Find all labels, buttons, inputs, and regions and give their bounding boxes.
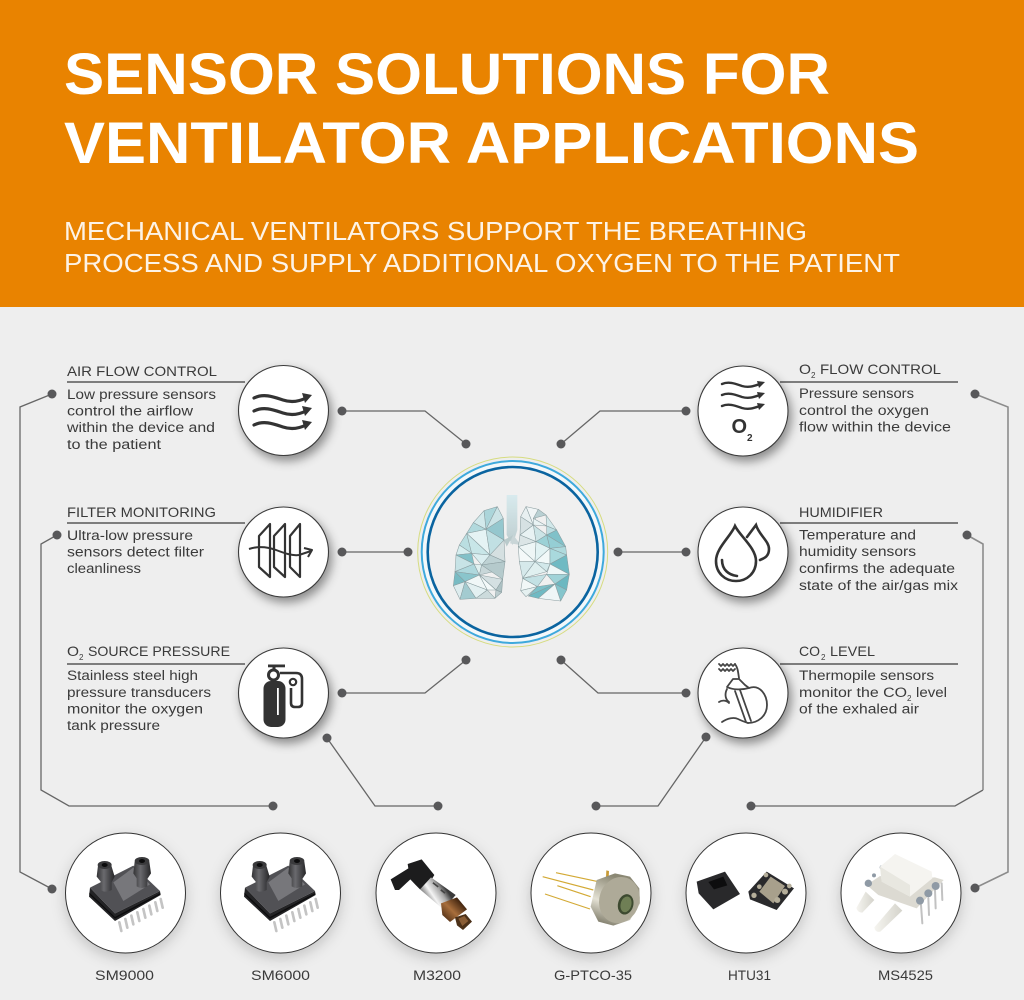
description: co2 level: of the exhaled air — [799, 702, 920, 716]
icon: oxygen flow waves: 2 — [747, 433, 753, 444]
product name: HTU31: HTU31 — [728, 967, 771, 983]
title: VENTILATOR APPLICATIONS — [64, 111, 919, 176]
panel: o2 flow control — [698, 361, 958, 456]
description: o2 flow control — [799, 386, 951, 434]
title — [64, 42, 919, 176]
connector lines — [20, 390, 1008, 894]
product: MS4525 — [841, 833, 961, 983]
product image: HTU31 chips — [697, 872, 794, 910]
heading: o2 flow control: FLOW CONTROL — [820, 361, 941, 377]
description: o2 source pressure: Stainless steel high — [67, 668, 198, 683]
heading: o2 source pressure: SOURCE PRESSURE — [88, 643, 230, 659]
description: o2 flow control: Pressure sensors — [799, 386, 914, 401]
heading: co2 level — [799, 643, 875, 662]
header banner — [0, 0, 1024, 307]
heading: humidifier: HUMIDIFIER — [799, 504, 883, 520]
description: filter monitoring: Ultra-low pressure — [67, 528, 193, 543]
product: SM6000 — [220, 833, 340, 983]
product image: SM9000 sensor — [89, 857, 163, 931]
icon: oxygen tank — [238, 648, 328, 738]
product image: SM6000 sensor — [244, 857, 318, 931]
heading: co2 level: LEVEL — [830, 643, 875, 659]
product: G-PTCO-35 — [531, 833, 651, 983]
product image: MS4525 sensor — [856, 854, 944, 932]
description: o2 source pressure: pressure transducers — [67, 685, 211, 700]
description: filter monitoring: sensors detect filter — [67, 544, 205, 560]
description: co2 level: monitor the CO — [799, 685, 907, 700]
product: HTU31 — [686, 833, 806, 983]
heading: o2 flow control: 2 — [811, 371, 816, 380]
panel: humidifier — [698, 504, 958, 597]
product name: G-PTCO-35: G-PTCO-35 — [554, 967, 632, 983]
description: co2 level — [799, 668, 947, 716]
icon: oxygen flow waves: O — [732, 416, 747, 438]
heading: filter monitoring: FILTER MONITORING — [67, 504, 216, 520]
description: air flow control — [66, 387, 216, 452]
subtitle — [64, 216, 900, 278]
description: o2 source pressure: monitor the oxygen — [67, 702, 203, 716]
panel: o2 source pressure — [67, 643, 328, 738]
title: SENSOR SOLUTIONS FOR — [64, 42, 830, 107]
product name: MS4525: MS4525 — [878, 967, 933, 983]
subtitle: PROCESS AND SUPPLY ADDITIONAL OXYGEN TO THE PATIENT — [64, 248, 900, 278]
product: M3200 — [376, 833, 496, 983]
description: filter monitoring: cleanliness — [67, 561, 141, 576]
heading: co2 level: CO — [799, 643, 820, 659]
description: humidifier — [799, 528, 958, 593]
panel: co2 level — [698, 643, 958, 738]
description: filter monitoring — [67, 528, 205, 576]
description: humidifier: state of the air/gas mix — [799, 578, 958, 593]
description: co2 level: level — [916, 685, 947, 700]
heading: co2 level: 2 — [821, 653, 826, 662]
heading: o2 flow control: O — [799, 361, 811, 377]
description: co2 level: Thermopile sensors — [799, 668, 934, 683]
icon: oxygen flow waves — [698, 366, 788, 456]
product: SM9000 — [66, 833, 186, 983]
product image: M3200 transducer — [391, 859, 472, 930]
panel: filter monitoring — [67, 504, 328, 597]
description: air flow control: Low pressure sensors — [67, 387, 216, 402]
heading: air flow control: AIR FLOW CONTROL — [67, 363, 217, 379]
heading: o2 source pressure: O — [67, 643, 79, 659]
heading: o2 flow control — [799, 361, 941, 380]
product name: SM9000: SM9000 — [95, 967, 154, 983]
description: humidifier: Temperature and — [799, 528, 916, 542]
panel: air flow control — [66, 363, 329, 456]
product name: SM6000: SM6000 — [251, 967, 310, 983]
lungs mesh illustration — [453, 495, 569, 601]
icon: breathing mask — [698, 648, 788, 738]
description: o2 source pressure — [67, 668, 211, 733]
description: air flow control: control the airflow — [67, 404, 193, 418]
description: humidifier: confirms the adequate — [799, 561, 955, 576]
icon: air flow waves — [238, 366, 328, 456]
description: o2 flow control: flow within the device — [799, 420, 951, 434]
icon: filter panels — [238, 507, 328, 597]
heading: o2 source pressure: 2 — [79, 653, 84, 662]
central lungs emblem — [418, 457, 608, 647]
product name: M3200: M3200 — [413, 967, 461, 983]
description: co2 level: 2 — [907, 694, 912, 703]
icon: water drops — [698, 507, 788, 597]
description: o2 source pressure: tank pressure — [67, 718, 160, 733]
product image: G-PTCO-35 thermopile — [543, 870, 646, 928]
description: air flow control: to the patient — [67, 437, 161, 452]
concentric rings — [418, 457, 608, 647]
description: air flow control: within the device and — [66, 420, 215, 435]
description: humidifier: humidity sensors — [799, 544, 916, 559]
description: o2 flow control: control the oxygen — [799, 403, 929, 418]
subtitle: MECHANICAL VENTILATORS SUPPORT THE BREATHING — [64, 216, 807, 246]
